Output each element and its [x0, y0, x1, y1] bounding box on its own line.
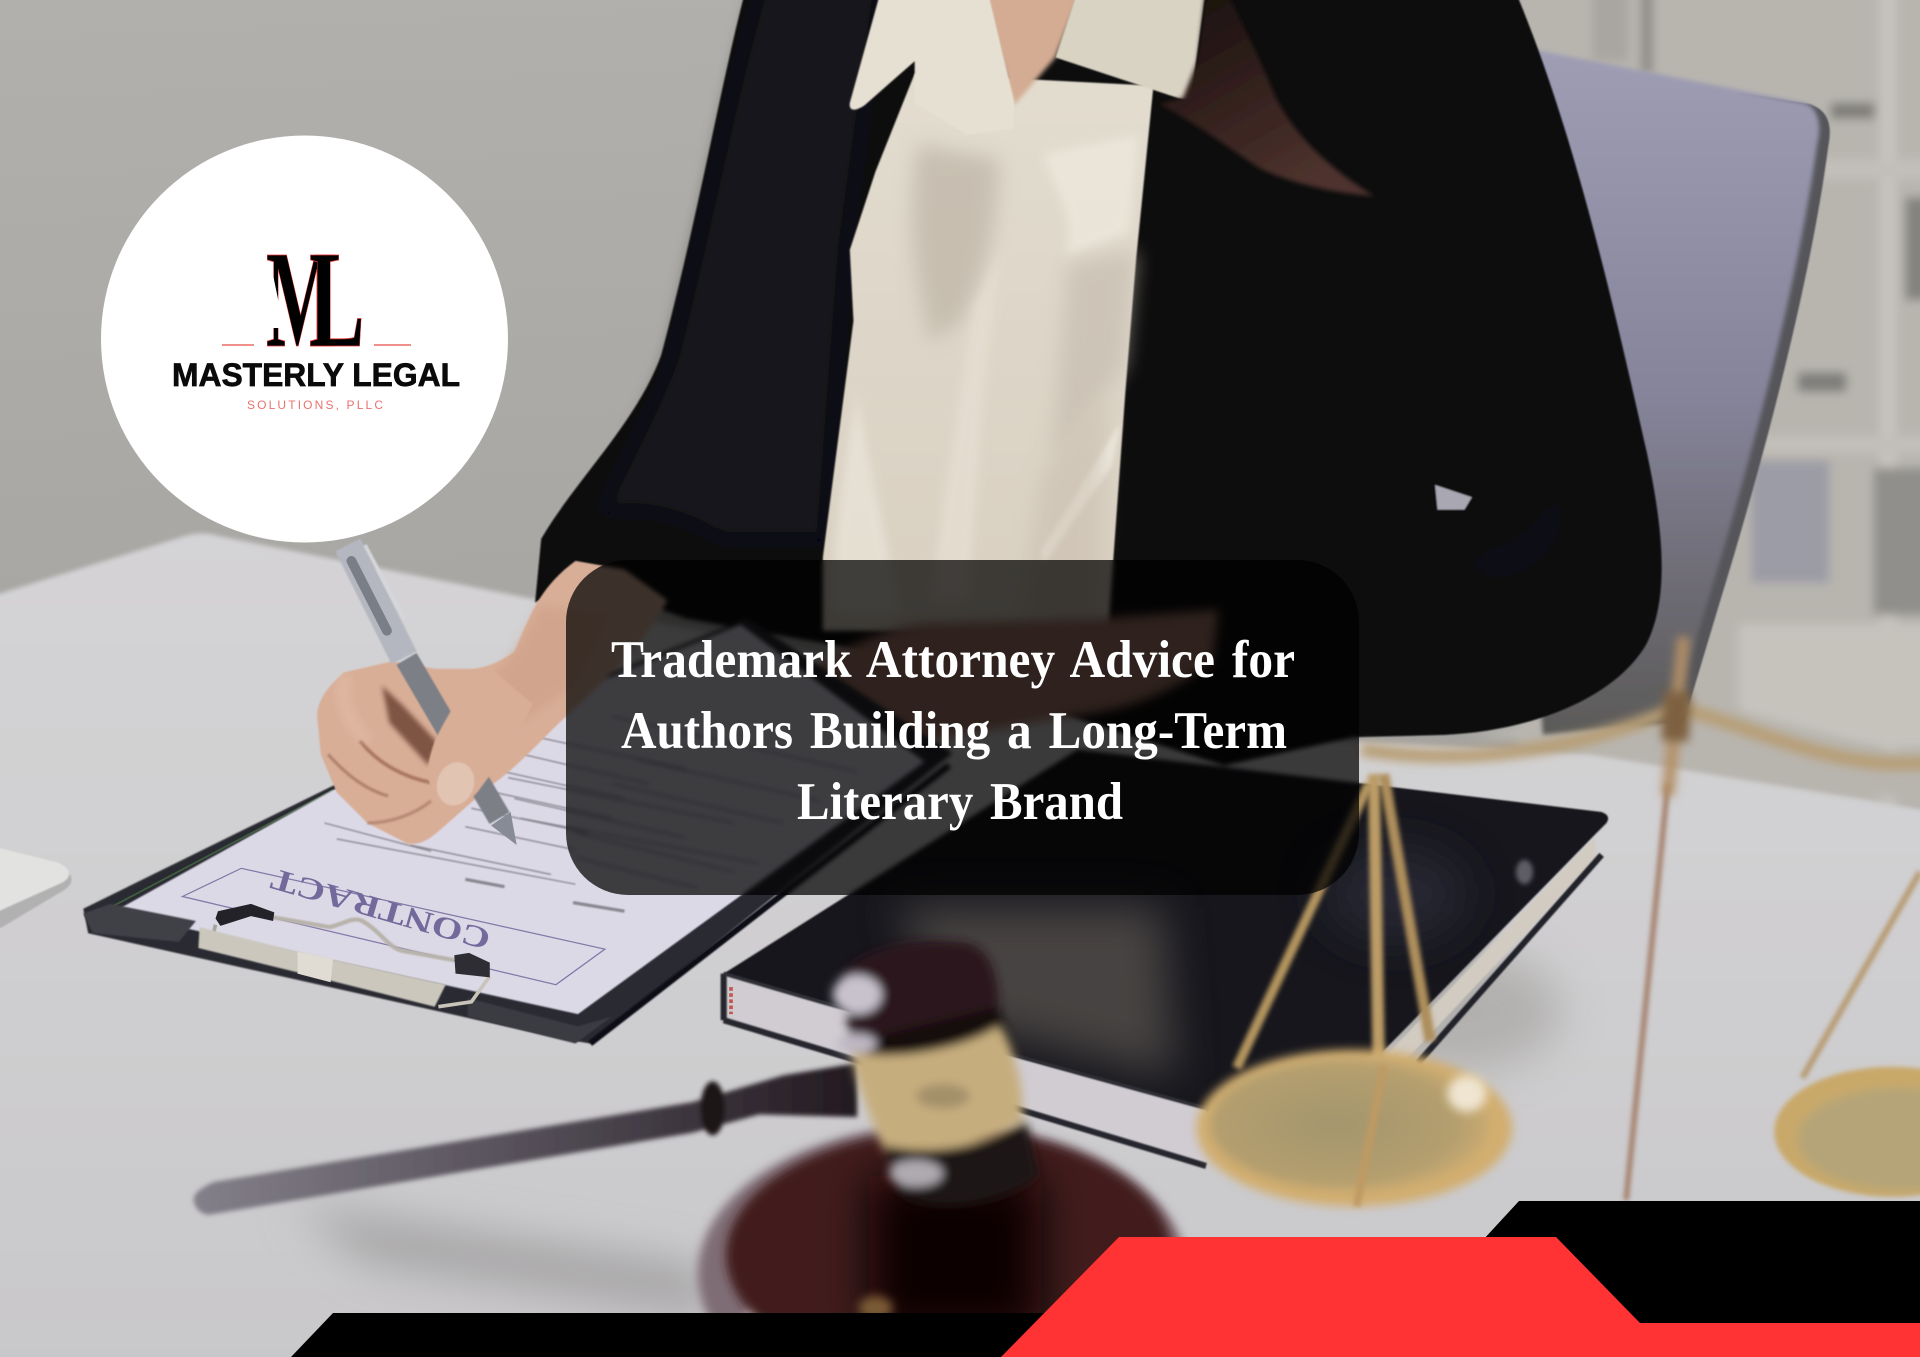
gavel base shadow on desk — [294, 1206, 722, 1317]
desk surface — [0, 533, 1920, 1357]
clipboard lower pad — [468, 998, 612, 1043]
background: blurred window shelves — [1518, 0, 1920, 808]
title: Literary Brand — [797, 773, 1123, 831]
clip bar — [198, 927, 446, 1007]
logo monogram: L — [309, 222, 365, 376]
gavel head — [833, 941, 1038, 1206]
scale pan right — [1774, 1067, 1920, 1197]
balance scale rods — [1237, 637, 1920, 1200]
blouse collar — [850, 0, 1206, 135]
logo monogram: M — [266, 223, 337, 377]
clip wire — [273, 917, 454, 960]
logo rules — [222, 344, 411, 346]
clip right knob — [454, 953, 490, 977]
gavel sound block — [698, 1124, 1188, 1357]
contract text lines — [324, 716, 857, 911]
clipboard — [83, 618, 953, 1043]
hair strands — [1160, 0, 1374, 196]
contract heading: CONTRACT — [267, 862, 494, 957]
thumbnail — [431, 757, 480, 811]
office chair backrest — [1518, 49, 1830, 735]
blouse — [823, 73, 1153, 631]
title — [611, 631, 1295, 831]
logo monogram mask — [262, 270, 284, 328]
clipboard corner pad — [83, 904, 196, 942]
title panel — [566, 560, 1359, 895]
gavel handle — [193, 1063, 857, 1215]
background: grey wall — [0, 0, 1920, 857]
contract title box — [182, 868, 605, 985]
scale pan left — [1196, 1050, 1512, 1206]
laptop corner — [0, 845, 72, 928]
pen — [348, 545, 517, 845]
clipboard paper — [113, 625, 924, 1014]
logo circle — [101, 136, 508, 542]
title: Authors Building a Long-Term — [621, 702, 1287, 760]
neck skin — [980, 0, 1084, 105]
clip clasp — [298, 952, 333, 982]
hand resting under title panel — [754, 610, 1218, 761]
footer band: red — [1001, 1237, 1920, 1357]
logo wordmark: MASTERLY LEGAL — [172, 357, 460, 393]
woman's jacket — [535, 0, 1662, 765]
book — [724, 750, 1608, 1166]
title: Trademark Attorney Advice for — [611, 631, 1295, 689]
logo tagline: SOLUTIONS, PLLC — [247, 398, 383, 412]
footer band: black right — [1483, 1201, 1920, 1330]
clip left knob — [216, 904, 274, 926]
footer band: black left — [291, 1313, 1070, 1357]
writing hand and forearm — [317, 561, 667, 844]
thumb — [428, 667, 533, 805]
